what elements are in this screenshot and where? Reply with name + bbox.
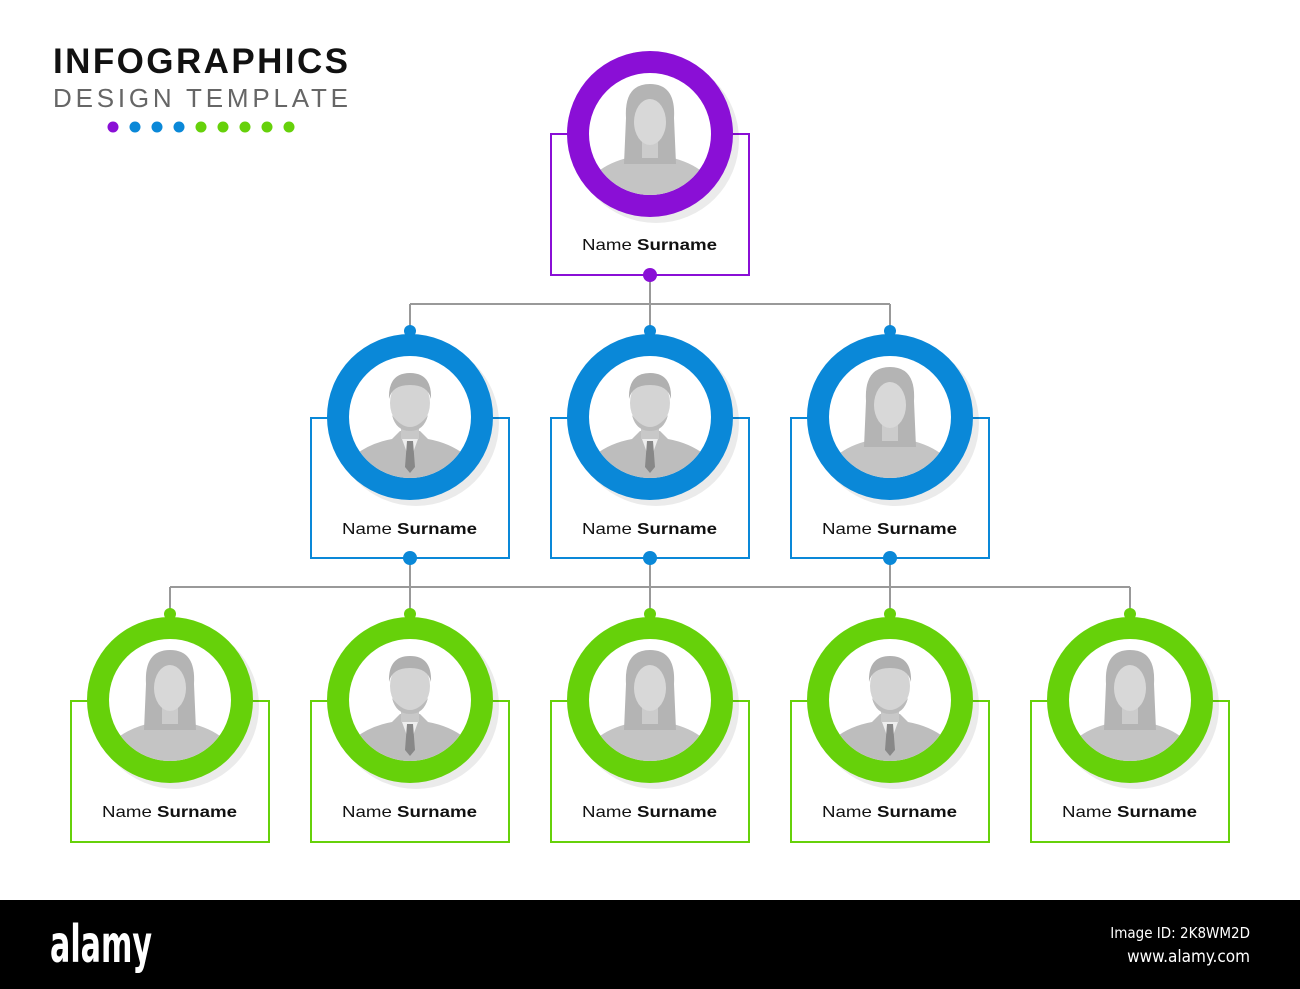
footer bar: www.alamy.com: [1127, 947, 1250, 967]
title: DESIGN TEMPLATE: [53, 83, 348, 113]
footer bar: [0, 900, 1300, 989]
node: level 3 (green): Name Surname: [102, 804, 237, 821]
node: level 3 (green): Name Surname: [1062, 804, 1197, 821]
node: level 2 (blue): Name Surname: [822, 521, 957, 538]
connector lines: [170, 275, 1130, 614]
node: level 2 (blue): Name Surname: [582, 521, 717, 538]
node: top (purple): Name Surname: [582, 237, 717, 254]
node: level 2 (blue): Name Surname: [342, 521, 477, 538]
node: level 3 (green): Name Surname: [822, 804, 957, 821]
title: INFOGRAPHICS: [53, 42, 348, 81]
footer bar: Image ID: 2K8WM2D: [1110, 924, 1250, 942]
footer bar: alamy: [50, 915, 152, 975]
node: level 3 (green): Name Surname: [342, 804, 477, 821]
node: top (purple): [551, 51, 749, 282]
node: level 3 (green): Name Surname: [582, 804, 717, 821]
title: [53, 42, 348, 113]
title dots: [108, 122, 294, 132]
node: level 3 (green): [71, 608, 1229, 842]
node: level 2 (blue): [311, 325, 989, 565]
